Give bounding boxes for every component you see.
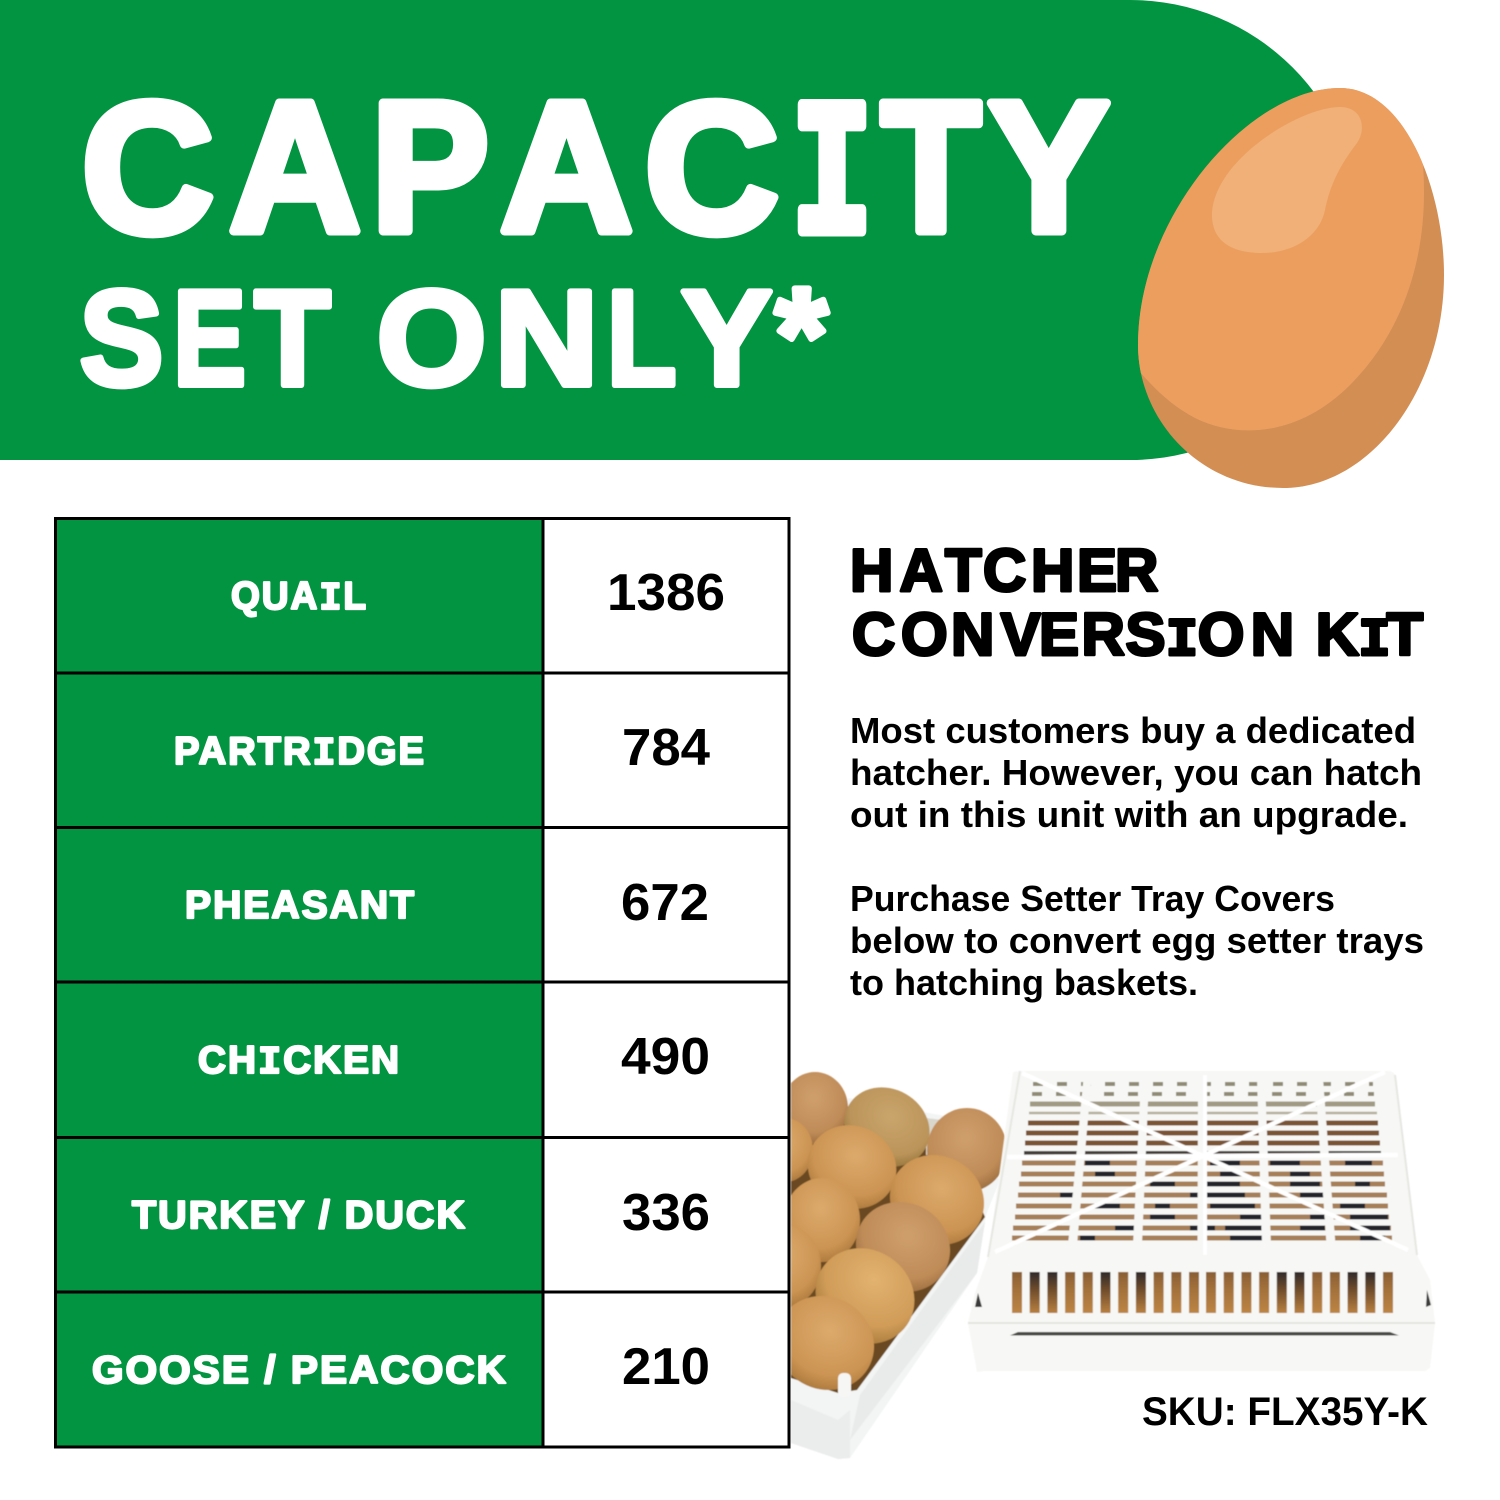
- subtitle: set only: N: [494, 262, 599, 414]
- title: capacity: C: [82, 65, 214, 272]
- row: partridge: PARTRIDGE: [174, 730, 426, 776]
- text block: setter tray covers: [850, 878, 1424, 1003]
- heading: hatcher conversion kit: CONVERS: [852, 601, 1166, 668]
- title: capacity: C: [644, 65, 779, 272]
- row: pheasant: [185, 874, 709, 932]
- row: turkey / duck: 336: [622, 1184, 710, 1242]
- text block: hatcher description: hatcher. However, you can hatch: [850, 752, 1422, 793]
- row: quail: [231, 564, 725, 622]
- heading: hatcher conversion kit: T: [1386, 601, 1423, 668]
- row: turkey / duck: TURKEY / DUCK: [132, 1194, 467, 1237]
- photo: hatching basket: [968, 1071, 1435, 1372]
- icon: egg: [1130, 80, 1444, 488]
- title: capacity: I: [791, 71, 873, 289]
- text block: hatcher description: [850, 710, 1422, 835]
- row: chicken: [198, 1028, 710, 1086]
- capacity table: [56, 518, 789, 1447]
- subtitle: set only: *: [775, 259, 828, 411]
- subtitle: set only: O: [377, 262, 487, 414]
- heading: hatcher conversion kit: I: [1166, 611, 1198, 672]
- row: pheasant: PHEASANT: [185, 884, 416, 927]
- title: capacity: [82, 64, 1110, 289]
- text block: setter tray covers: below to convert egg setter trays: [850, 920, 1424, 961]
- heading: hatcher conversion kit: K: [1316, 601, 1359, 668]
- row: goose / peacock: GOOSE / PEACOCK: [92, 1349, 508, 1392]
- subtitle: set only: E: [173, 262, 246, 414]
- heading: hatcher conversion kit: I: [1358, 611, 1391, 672]
- row: partridge: [174, 719, 710, 777]
- row: goose / peacock: [92, 1338, 710, 1396]
- sku label: SKU: FLX35Y-K: [1142, 1390, 1428, 1434]
- title: capacity: T: [881, 64, 981, 271]
- text block: hatcher description: Most customers buy a dedicated: [850, 710, 1416, 751]
- row: turkey / duck: [132, 1184, 710, 1242]
- subtitle: set only: Y: [681, 262, 772, 414]
- row: goose / peacock: 210: [622, 1338, 710, 1396]
- text block: setter tray covers: Purchase Setter Tray Covers: [850, 878, 1335, 919]
- title: capacity: P: [371, 64, 489, 271]
- row: pheasant: 672: [621, 874, 709, 932]
- row: quail: QUAIL: [231, 575, 368, 621]
- heading: hatcher conversion kit: HATCHER: [850, 537, 1158, 604]
- green header banner: [0, 0, 1360, 460]
- title: capacity: A: [500, 64, 633, 271]
- heading: hatcher conversion kit: [850, 537, 1423, 672]
- subtitle: set only: S: [80, 262, 164, 414]
- text block: setter tray covers: to hatching baskets.: [850, 962, 1198, 1003]
- row: partridge: 784: [622, 719, 710, 777]
- title: capacity: A: [229, 64, 361, 271]
- subtitle: set only: L: [607, 262, 677, 414]
- row: chicken: 490: [621, 1028, 710, 1086]
- subtitle: set only: T: [254, 262, 331, 414]
- table: grid lines: [56, 518, 789, 1447]
- subtitle: set only: [80, 259, 828, 414]
- row: quail: 1386: [607, 564, 725, 622]
- table: green label column: [56, 519, 543, 1446]
- heading: hatcher conversion kit: ON: [1198, 601, 1294, 668]
- photo: tray of eggs: [790, 1071, 1005, 1459]
- text block: hatcher description: out in this unit with an upgrade.: [850, 794, 1408, 835]
- row: chicken: CHICKEN: [198, 1039, 401, 1085]
- title: capacity: Y: [988, 64, 1110, 271]
